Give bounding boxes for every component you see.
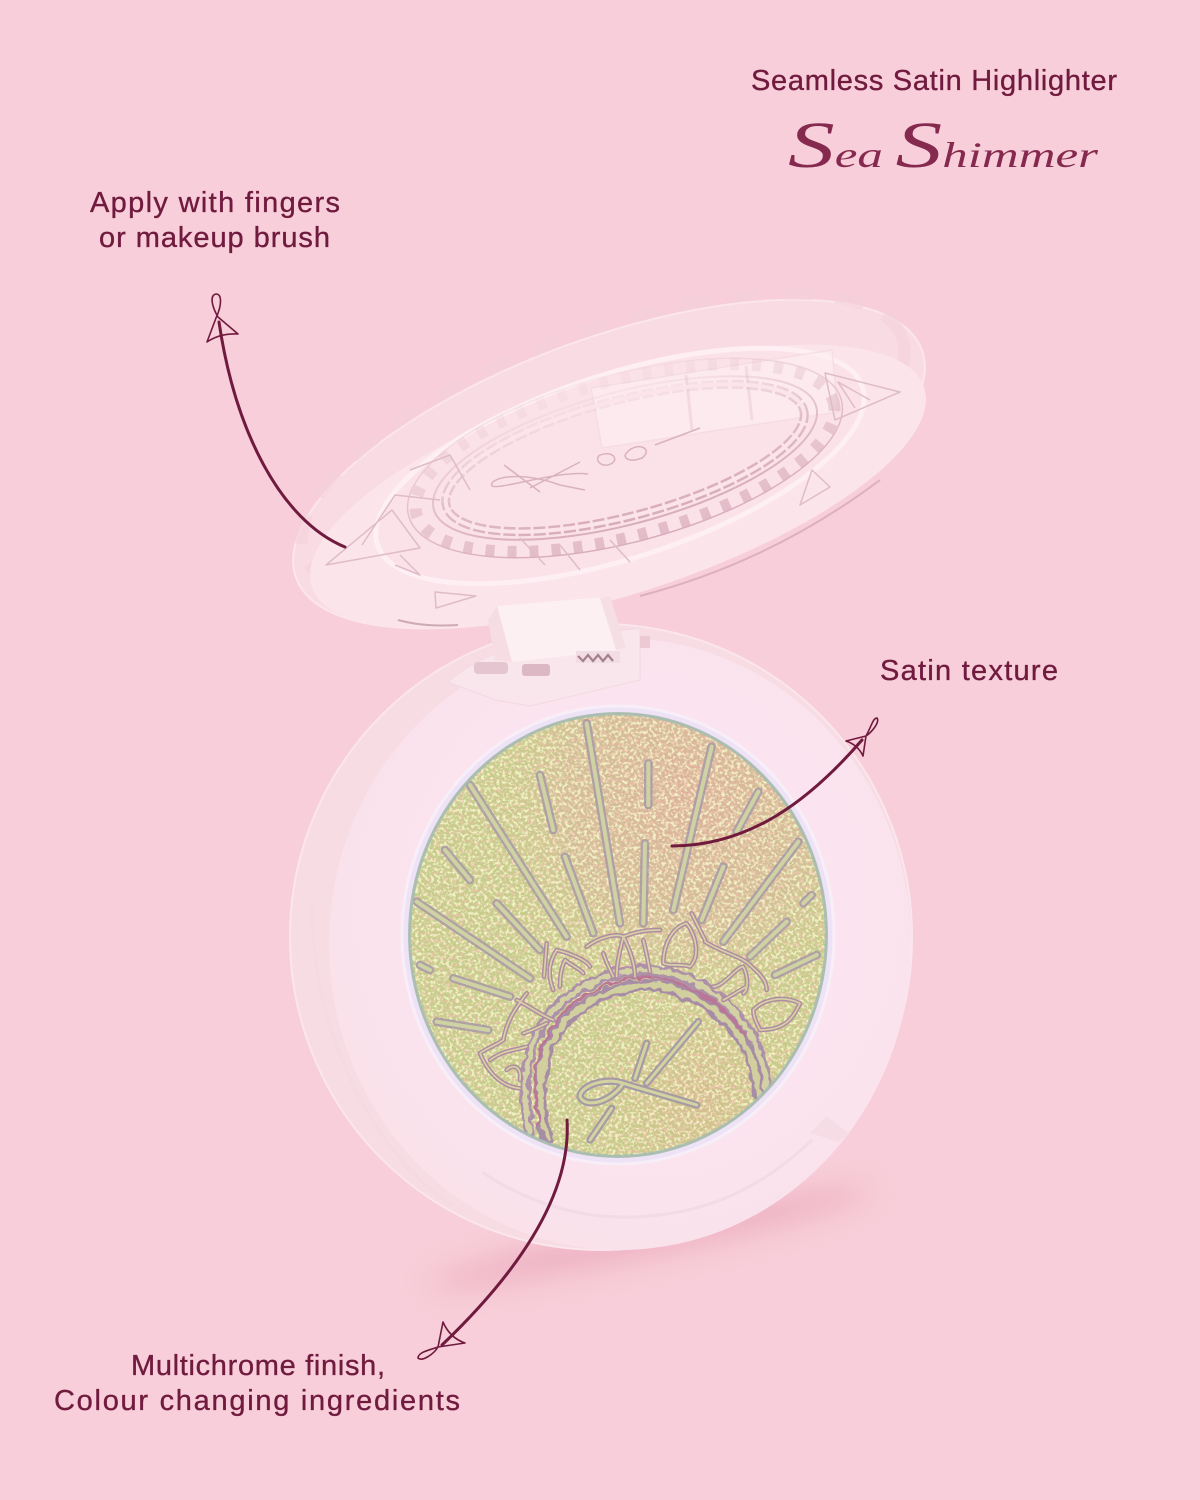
compact drop shadow [426, 1174, 874, 1302]
arrow: application [207, 294, 345, 547]
lid latch window [591, 350, 838, 448]
callout: finish: Colour changing ingredients [54, 1385, 460, 1417]
engraved mandala ring [387, 319, 863, 597]
hinge clips [448, 628, 640, 706]
embossed K logo [580, 1022, 698, 1140]
heading: Seamless Satin Highlighter [751, 65, 1117, 97]
rim engraved texture [265, 230, 941, 662]
lid edge highlights [398, 620, 458, 625]
shimmer powder [410, 714, 826, 1156]
product name: S ea S himmer [788, 109, 1099, 182]
lid recessed circle [349, 300, 891, 632]
embossed mandala petals [480, 913, 800, 1088]
lid signature mark [492, 428, 700, 492]
compact base [290, 624, 912, 1250]
base top face [329, 638, 911, 1250]
embossed braided arch [525, 970, 767, 1137]
pan edge shading [410, 714, 826, 1156]
lid rim [253, 232, 965, 696]
callout: texture: Satin texture [880, 655, 1058, 687]
lid face [279, 286, 957, 688]
compact lid [253, 230, 965, 696]
arrow: texture [672, 718, 878, 846]
moulded step and lower notch [482, 1140, 812, 1217]
pan metal rim [402, 706, 834, 1164]
embossed sun rays [417, 723, 817, 1140]
callout: application: or makeup brush [99, 222, 330, 254]
callout: application: Apply with fingers [90, 187, 340, 219]
engraved star points [326, 373, 900, 608]
highlighter pan [400, 700, 840, 1170]
hinge arm [497, 597, 620, 662]
compact hinge [448, 596, 650, 706]
arrow: finish [418, 1120, 567, 1359]
callout: finish [54, 1350, 460, 1417]
callout: application [90, 187, 340, 254]
outer translucent rim [290, 624, 912, 1250]
callout: finish: Multichrome finish, [131, 1350, 385, 1382]
